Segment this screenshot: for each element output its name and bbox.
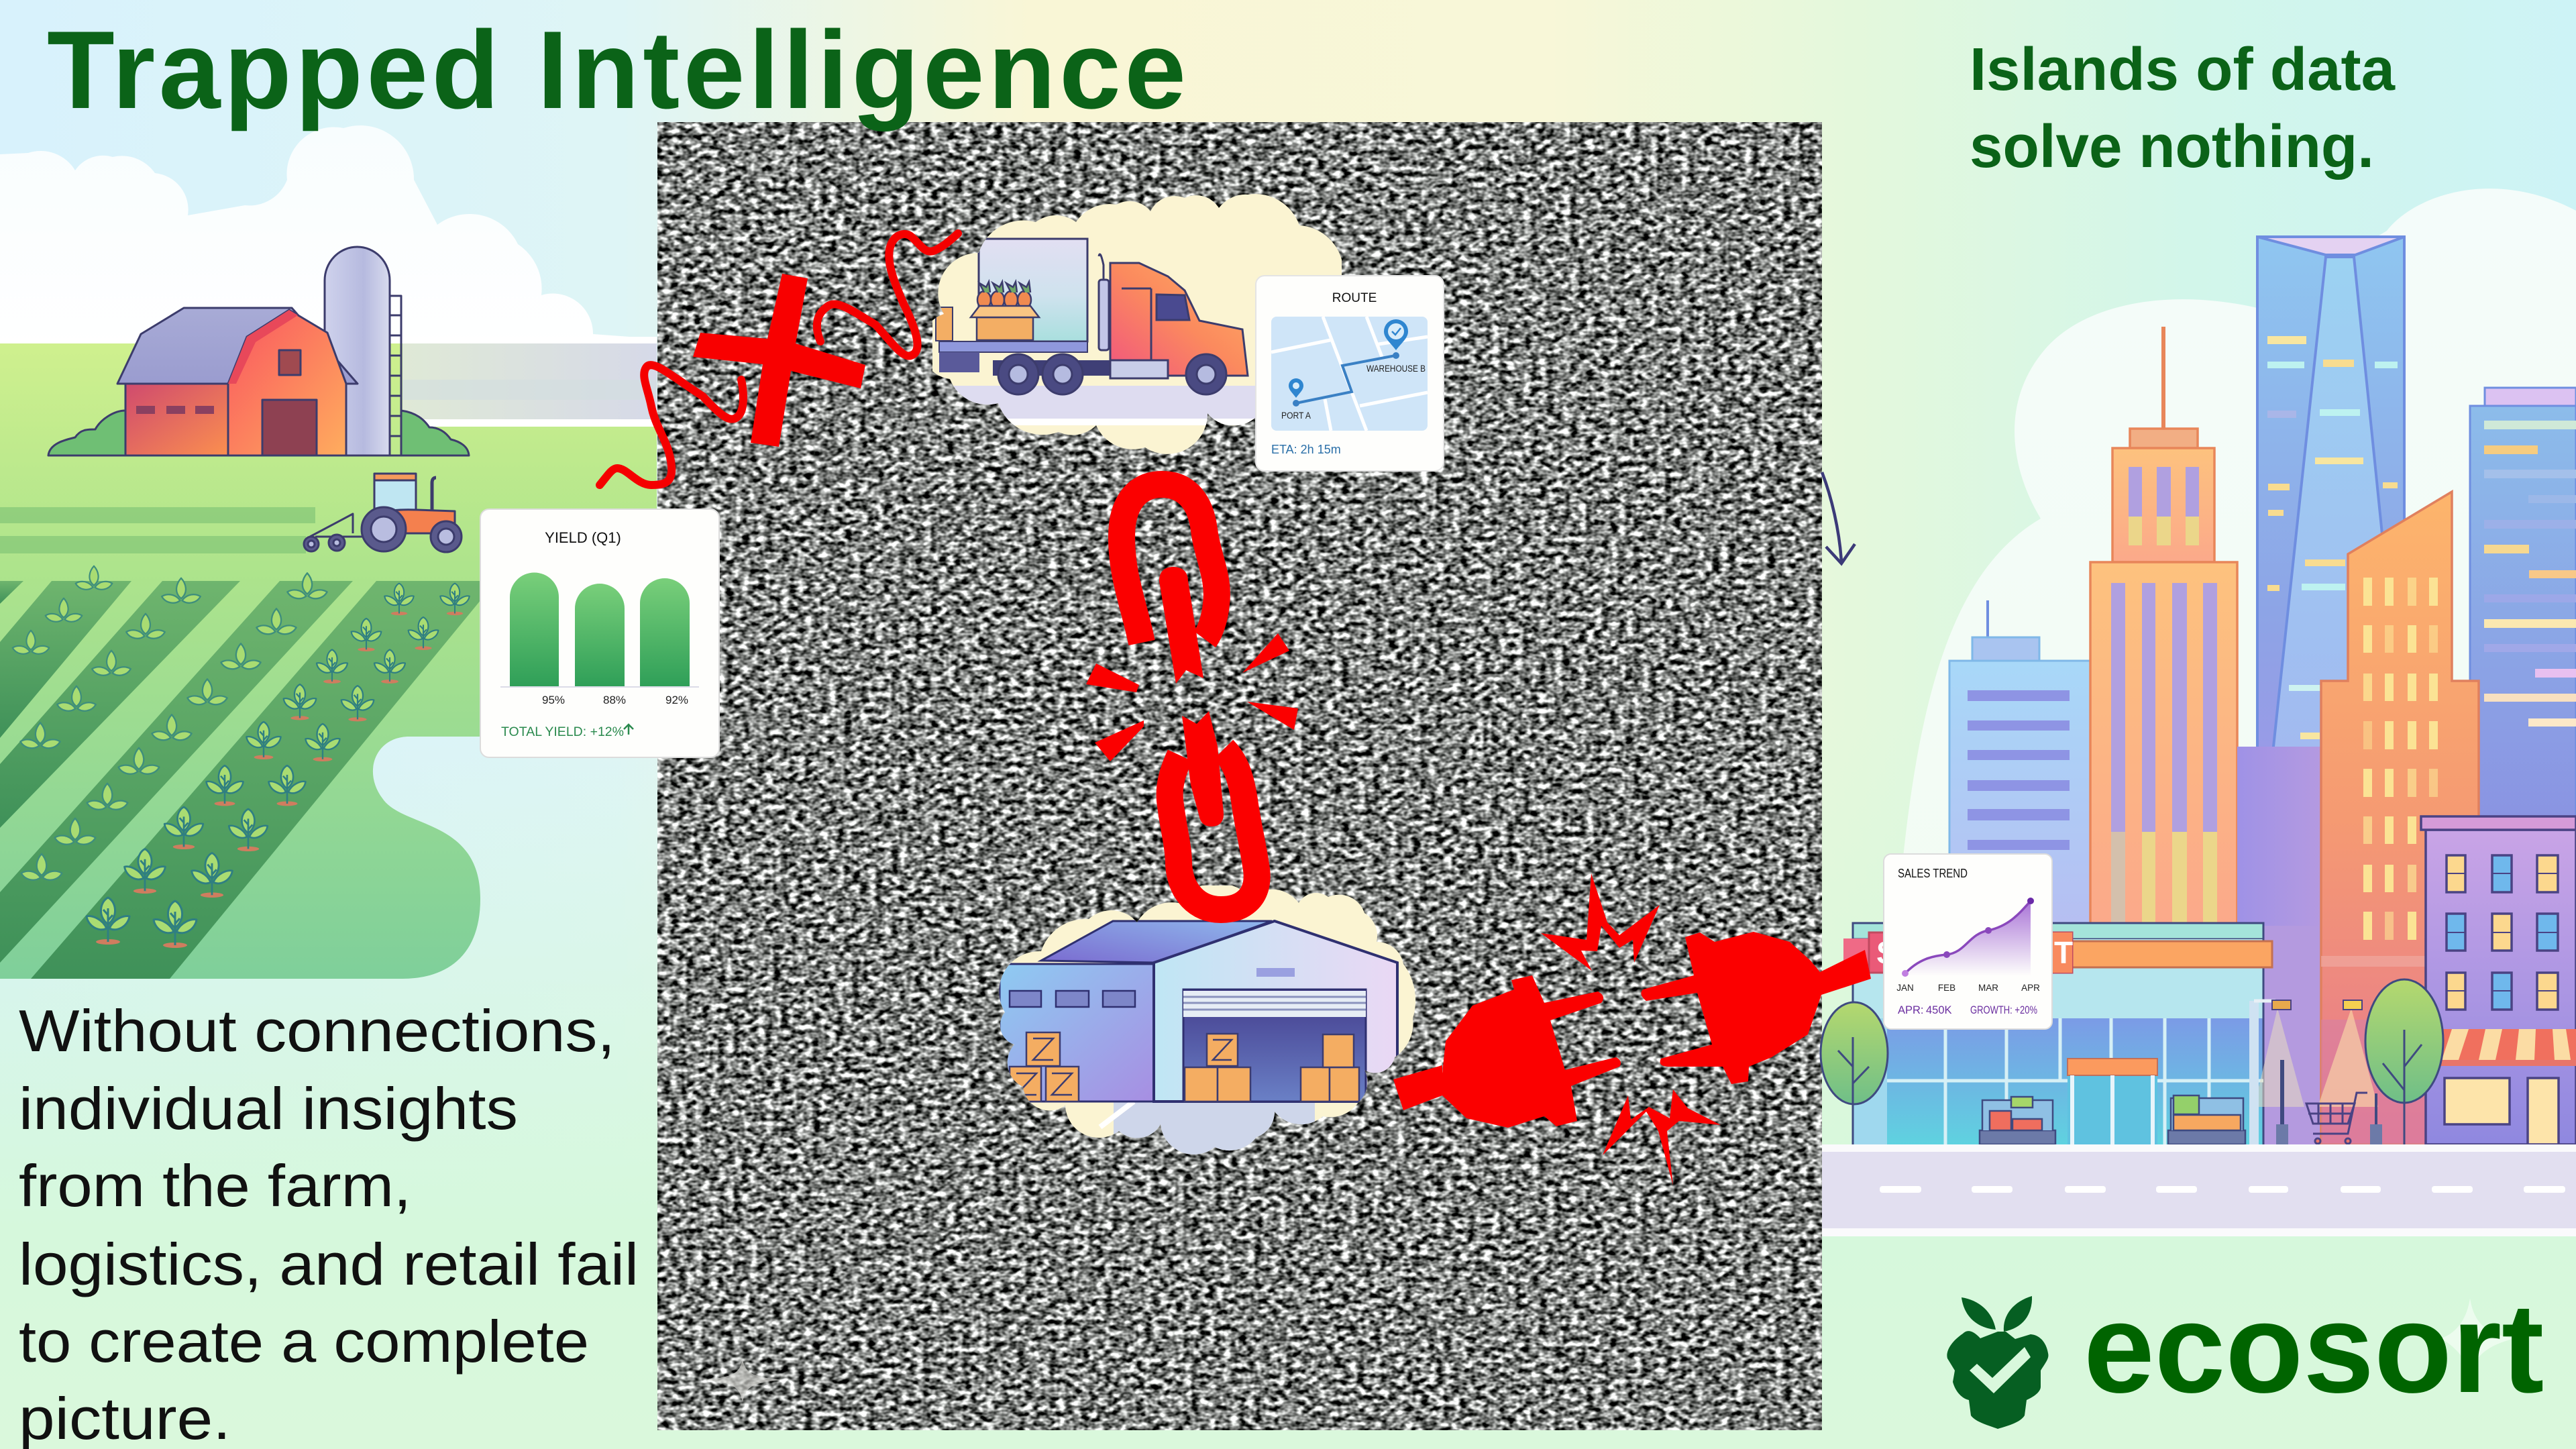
yield values xyxy=(542,694,688,706)
pin: port xyxy=(1289,378,1303,398)
icon: faint sparkle xyxy=(704,1360,782,1402)
boxes xyxy=(1010,1032,1359,1102)
building: small blue xyxy=(1949,600,2090,929)
plants: stemmed rows xyxy=(87,584,470,948)
farm clouds xyxy=(0,125,657,349)
chain lower tongue xyxy=(1182,711,1224,826)
road xyxy=(1822,1144,2576,1236)
card: route map xyxy=(1256,276,1444,471)
pin: warehouse xyxy=(1384,319,1408,350)
store door xyxy=(2068,1059,2157,1144)
icon: right tree xyxy=(2365,979,2443,1144)
route title: ROUTE xyxy=(1332,291,1377,305)
icon: street lamps and beams xyxy=(2254,1000,2382,1144)
sales months: MAR xyxy=(1978,983,1998,993)
yield values: 88% xyxy=(603,694,626,706)
logo: ecosort xyxy=(1947,1277,2544,1429)
icon: disconnected plugs xyxy=(1393,873,1871,1185)
building: orange antenna tower xyxy=(2090,327,2237,924)
icon: tractor xyxy=(304,474,462,552)
store sign letters: T xyxy=(2054,935,2073,970)
heading: islands of data xyxy=(1970,36,2396,180)
yield bars xyxy=(510,573,690,686)
yield total: TOTAL YIELD: +12% xyxy=(501,724,624,739)
sales months: FEB xyxy=(1938,983,1955,993)
icon: left tree xyxy=(1821,1002,1888,1144)
logo mark xyxy=(1947,1296,2048,1429)
yield title: YIELD (Q1) xyxy=(545,529,621,546)
text block: without connections: from the farm, xyxy=(19,1152,411,1219)
store sign letters: S xyxy=(1876,935,1897,970)
text block: without connections: to create a complete xyxy=(19,1308,589,1375)
sales title: SALES TREND xyxy=(1898,867,1968,880)
tilled stripes xyxy=(0,507,315,553)
spark top xyxy=(1541,873,1660,971)
text block: without connections xyxy=(19,998,639,1449)
trailer xyxy=(979,239,1087,341)
card: sales trend xyxy=(1884,854,2052,1029)
right plug xyxy=(1641,932,1871,1084)
panel: city scene xyxy=(1821,189,2576,1236)
icon: barn and silo xyxy=(48,247,469,455)
icon: frayed wavy line xyxy=(600,233,958,485)
chain sparks xyxy=(1086,633,1298,761)
building: back right xyxy=(2470,388,2576,943)
route map: PORT A xyxy=(1281,411,1311,421)
building: orange right xyxy=(2321,492,2479,1144)
scene: truck xyxy=(932,188,1362,456)
chain upper link xyxy=(1122,484,1217,643)
card: yield chart xyxy=(480,509,719,757)
text block: without connections: logistics, and retail fail xyxy=(19,1231,639,1297)
sales months xyxy=(1896,983,2040,993)
panel: grey noise centre xyxy=(657,122,1822,1430)
logo sparkle xyxy=(2441,1298,2515,1377)
field xyxy=(0,343,657,979)
distant haze xyxy=(402,337,657,427)
logo text: ecosort xyxy=(2084,1277,2544,1419)
crate left xyxy=(936,307,953,341)
awning xyxy=(2427,1029,2576,1066)
title: Trapped Intelligence xyxy=(47,8,1186,131)
sales stats: 450K xyxy=(1926,1004,1952,1016)
chain upper tongue xyxy=(1159,567,1203,684)
sales stats: APR: xyxy=(1898,1004,1924,1016)
route map: WAREHOUSE B xyxy=(1366,364,1426,374)
store displays xyxy=(1980,1095,2245,1144)
scene: warehouse xyxy=(993,885,1422,1162)
icon: up arrow xyxy=(624,724,633,735)
route map xyxy=(1271,317,1428,431)
building: purple corner shop xyxy=(2421,816,2576,1144)
city background cloud xyxy=(1885,189,2576,1144)
plants: leaf rows xyxy=(13,566,327,880)
left plug xyxy=(1393,975,1621,1128)
route ETA: ETA: 2h 15m xyxy=(1271,443,1341,456)
sales months: JAN xyxy=(1896,983,1914,993)
wheels xyxy=(998,354,1226,394)
yield values: 92% xyxy=(665,694,688,706)
panel: farm scene xyxy=(0,125,657,979)
heading: islands of data: solve nothing. xyxy=(1970,113,2374,180)
icon: shopping cart xyxy=(2278,1093,2367,1144)
sales months: APR xyxy=(2021,983,2040,993)
chain lower link xyxy=(1170,749,1257,910)
produce crate xyxy=(971,282,1039,340)
cab xyxy=(1099,254,1248,378)
heading: islands of data: Islands of data xyxy=(1970,36,2396,103)
panel: store front xyxy=(1843,923,2272,1144)
crop rows xyxy=(0,581,496,979)
arrow: curved down arrow xyxy=(1822,472,1855,564)
store sign letters xyxy=(1876,935,2073,970)
text block: without connections: Without connections, xyxy=(19,998,615,1064)
sales stats xyxy=(1898,1004,2037,1016)
sales line chart xyxy=(1902,898,2034,977)
icon: broken chain xyxy=(1086,484,1298,910)
building: tall blue tower xyxy=(2257,237,2404,921)
building: behind store xyxy=(2237,747,2324,1149)
spark bottom xyxy=(1603,1089,1721,1185)
sales stats: GROWTH: +20% xyxy=(1970,1004,2037,1016)
text block: without connections: individual insights xyxy=(19,1075,518,1142)
yield values: 95% xyxy=(542,694,565,706)
icon: red X xyxy=(693,274,865,447)
